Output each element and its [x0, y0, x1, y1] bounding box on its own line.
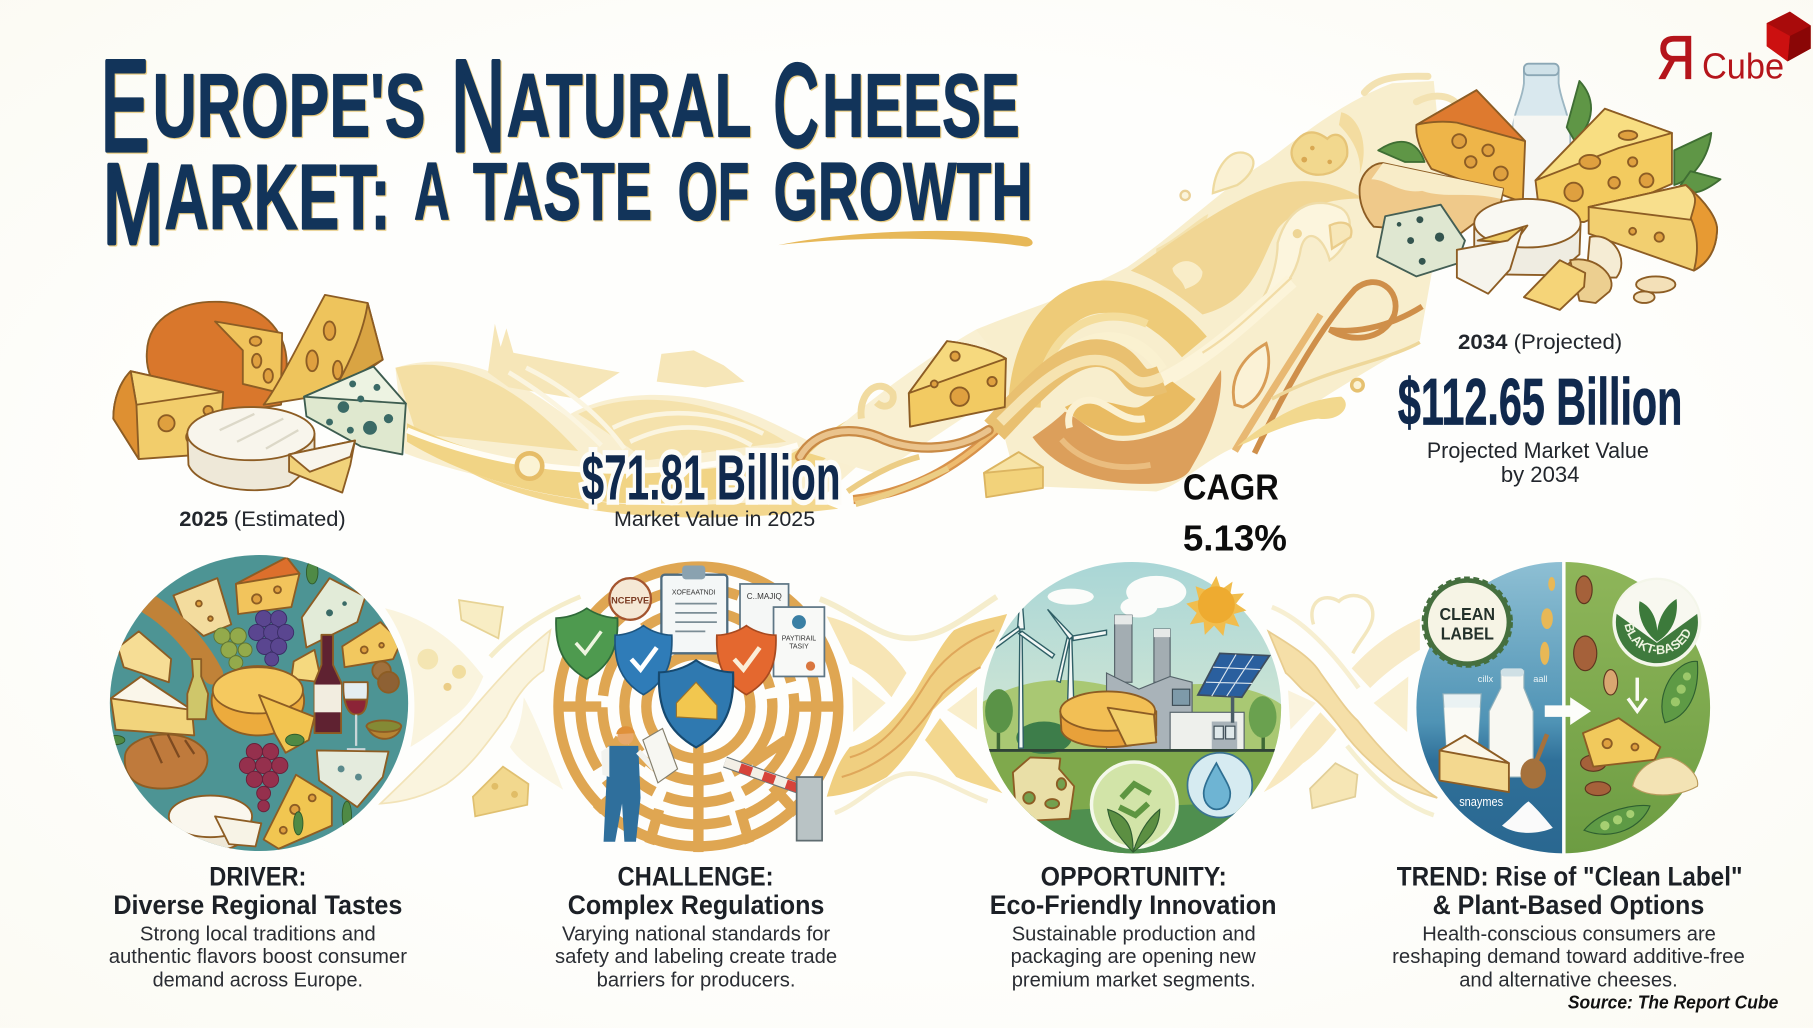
- body: trend: Health-conscious consumers are: [1422, 923, 1716, 946]
- crumbled plant cheese: [1633, 757, 1698, 795]
- bread loaf: [125, 734, 207, 789]
- brie wheel: [187, 407, 314, 490]
- badge: clean label: CLEAN: [1440, 604, 1495, 624]
- body: driver: [109, 923, 407, 991]
- shield: blue: [615, 626, 672, 695]
- body: challenge: barriers for producers.: [597, 968, 796, 991]
- golden fold: [1131, 181, 1364, 315]
- title: TASTE: [473, 147, 652, 238]
- logo: RCube: Я: [1657, 24, 1695, 92]
- center wheel: [212, 666, 314, 753]
- illustration: 2034 cheese group: [1360, 64, 1720, 310]
- icon: regulation maze: [555, 565, 842, 852]
- panel: trend: & Plant-Based Options: [1433, 890, 1704, 920]
- green grapes: [214, 628, 252, 670]
- panel: challenge: [555, 565, 842, 991]
- title: C: [774, 41, 819, 171]
- orange wedge: [236, 557, 299, 614]
- glass of milk: [1443, 694, 1481, 747]
- title: A: [414, 147, 450, 238]
- arch band: [1024, 297, 1194, 407]
- wine bottle: [314, 635, 341, 733]
- title: ATURAL: [506, 55, 752, 156]
- trees: [985, 689, 1276, 754]
- body: trend: and alternative cheeses.: [1459, 968, 1678, 991]
- baguette: [148, 604, 213, 674]
- panel: opportunity: [977, 562, 1289, 991]
- red grapes: [239, 744, 288, 812]
- line ground: [989, 749, 1278, 752]
- body: opportunity: [1011, 923, 1256, 991]
- scoop: [1520, 734, 1547, 789]
- heading: opportunity: OPPORTUNITY:: [1041, 862, 1227, 892]
- cagr: 5.13%: [1183, 518, 1287, 558]
- icon: regional cheese platter: [106, 555, 408, 851]
- heading: challenge: CHALLENGE:: [617, 862, 774, 892]
- title: OF: [678, 147, 749, 238]
- heading: trend: TREND: Rise of "Clean Label": [1397, 862, 1742, 892]
- grain sprigs: [1540, 577, 1555, 665]
- milk bottle: [1512, 64, 1570, 208]
- body: trend: reshaping demand toward additive-free: [1392, 945, 1745, 968]
- seal: NCEPVE: [611, 596, 649, 606]
- cream streak: [1147, 281, 1292, 387]
- body: challenge: safety and labeling create trade: [555, 945, 837, 968]
- body: opportunity: premium market segments.: [1012, 968, 1256, 991]
- small slices: [1524, 236, 1675, 310]
- brown crescent: [1033, 370, 1221, 484]
- cheese wheel: [1060, 691, 1156, 747]
- white wheel: [1474, 199, 1581, 275]
- body: driver: authentic flavors boost consumer: [109, 945, 407, 968]
- small ingredient labels: cillx: [1478, 674, 1493, 684]
- icon: clean label and plant based split: [1416, 562, 1710, 854]
- panel: trend: [1392, 562, 1745, 991]
- worker: [601, 726, 678, 842]
- caption: projected market value: by 2034: [1501, 462, 1579, 487]
- down arrow: [1628, 678, 1646, 711]
- paper: national taste: PAYTIRAIL: [782, 636, 816, 643]
- title underline swoosh: [778, 231, 1033, 246]
- badge: plant based: [1612, 578, 1702, 667]
- shield: orange: [717, 626, 776, 695]
- left cheese: [118, 631, 171, 682]
- water drop circle: [1187, 753, 1252, 818]
- small ingredient labels: snaymes: [1459, 794, 1503, 809]
- paper: national taste: [774, 607, 824, 676]
- badge: clean label: [1423, 578, 1511, 666]
- clipboard: XOFEAATNDI: [672, 589, 716, 596]
- wine glass: [343, 682, 368, 749]
- nuts: [1574, 576, 1618, 796]
- logo: RCube: [1657, 12, 1811, 92]
- label: 2034 projected: 2034 (Projected): [1458, 331, 1622, 354]
- hills: [977, 680, 1289, 752]
- panel: challenge: Complex Regulations: [568, 890, 824, 920]
- body: trend: [1392, 923, 1745, 991]
- cagr: [1183, 468, 1287, 558]
- value: 71.81 billion: $71.81 Billion: [582, 443, 841, 514]
- upper droplets: [1213, 153, 1253, 193]
- title: E: [101, 34, 149, 178]
- title: [101, 34, 1033, 268]
- panel: driver: Diverse Regional Tastes: [113, 890, 402, 920]
- tall wedge: [264, 295, 383, 405]
- gold mid band: [1065, 382, 1196, 436]
- blue cheese: [1377, 205, 1465, 276]
- title: M: [103, 141, 163, 268]
- yellow wedge bottom: [264, 775, 332, 849]
- label: 2025 estimated: 2025 (Estimated): [179, 508, 346, 531]
- body: driver: demand across Europe.: [153, 968, 363, 991]
- caption: projected market value: [1427, 438, 1649, 487]
- pale backdrop: [976, 81, 1445, 491]
- body: challenge: Varying national standards for: [562, 923, 830, 946]
- plant cheese wedge: [1583, 718, 1660, 767]
- shield: green: [556, 608, 618, 679]
- blue wedge: [302, 578, 365, 648]
- logo: RCube: Cube: [1702, 47, 1784, 87]
- seal: [609, 578, 651, 620]
- small ingredient labels: aall: [1533, 674, 1548, 684]
- recycle leaf circle: [1092, 762, 1177, 852]
- small ingredient labels: [1459, 674, 1548, 809]
- eco package: [1013, 757, 1074, 821]
- ribbons between challenge and opportunity: [820, 597, 1007, 813]
- paper: certificate: [740, 584, 789, 642]
- barrier gate: [725, 762, 822, 841]
- orange curl: [800, 430, 989, 457]
- body: opportunity: packaging are opening new: [1011, 945, 1256, 968]
- paper: national taste: TASIY: [789, 644, 809, 651]
- brie wedge: [289, 441, 355, 493]
- s ribbon: [853, 407, 1020, 500]
- paper: certificate: C..MAJIQ: [747, 592, 782, 601]
- yellow wedge: [342, 622, 401, 667]
- caption: market value in 2025: Market Value in 2025: [614, 508, 815, 531]
- caption: projected market value: Projected Market Value: [1427, 438, 1649, 463]
- peas: [1584, 661, 1698, 834]
- clouds: [1048, 576, 1186, 617]
- salt pile: [1502, 801, 1553, 833]
- panel: opportunity: Eco-Friendly Innovation: [990, 890, 1276, 920]
- ribbon: hills and flowing cheese band: [395, 324, 870, 518]
- small flying wedges: [909, 341, 1043, 497]
- ribbons between driver and challenge: [380, 597, 580, 816]
- pale wheel: [1360, 163, 1503, 234]
- source note: Source: The Report Cube: [1568, 991, 1778, 1012]
- blue cheese wedge: [304, 367, 406, 454]
- right wedge: [1589, 185, 1717, 271]
- body: driver: Strong local traditions and: [140, 923, 376, 946]
- title: HEESE: [822, 55, 1020, 156]
- arrow: white shift right: [1545, 697, 1591, 725]
- title: ARKET:: [164, 145, 391, 249]
- large swiss wedge: [1536, 109, 1672, 222]
- orange wedge: [1416, 90, 1525, 202]
- brie: [169, 796, 261, 851]
- heading: driver: DRIVER:: [209, 862, 306, 892]
- orange wheel: [147, 302, 287, 416]
- ribbon: central swirl rising to 2034: [800, 76, 1459, 504]
- leaves: [1378, 81, 1720, 193]
- nuts and olive bowl: [367, 661, 401, 739]
- cagr: CAGR: [1183, 468, 1279, 508]
- white wedge: [1457, 228, 1523, 294]
- title: UROPE'S: [153, 55, 426, 156]
- right loop: [1255, 282, 1422, 453]
- blue wedge right: [317, 750, 388, 807]
- wind turbines: [995, 608, 1108, 749]
- soft cheese wedge: [1440, 735, 1509, 792]
- left wedge: [111, 676, 194, 735]
- illustration: 2025 cheese group: [113, 295, 406, 493]
- oil bottle: [187, 659, 208, 719]
- ribbons between opportunity and trend: [1264, 596, 1437, 815]
- title: N: [451, 34, 505, 178]
- body: challenge: [555, 923, 837, 991]
- maze rings: [555, 567, 842, 852]
- factory: [1107, 615, 1244, 750]
- shield: cheese: [659, 660, 733, 747]
- sun: [1186, 576, 1246, 636]
- pale cheese top: [173, 578, 231, 636]
- clipboard: [661, 565, 727, 653]
- leaves: [106, 561, 352, 835]
- body: opportunity: Sustainable production and: [1012, 923, 1256, 946]
- left wedge: [113, 371, 223, 459]
- milk bottle: [1489, 668, 1533, 777]
- solar panel: [1198, 653, 1270, 723]
- ground: [990, 752, 1274, 854]
- panel: driver: [106, 555, 408, 991]
- lower droplets: [1237, 397, 1346, 446]
- badge: clean label: LABEL: [1441, 623, 1494, 643]
- icon: sustainable production: [977, 562, 1289, 861]
- badge: plant based: BLAKT-BASED: [1624, 623, 1690, 654]
- title: GROWTH: [774, 147, 1033, 238]
- purple grapes: [249, 611, 294, 666]
